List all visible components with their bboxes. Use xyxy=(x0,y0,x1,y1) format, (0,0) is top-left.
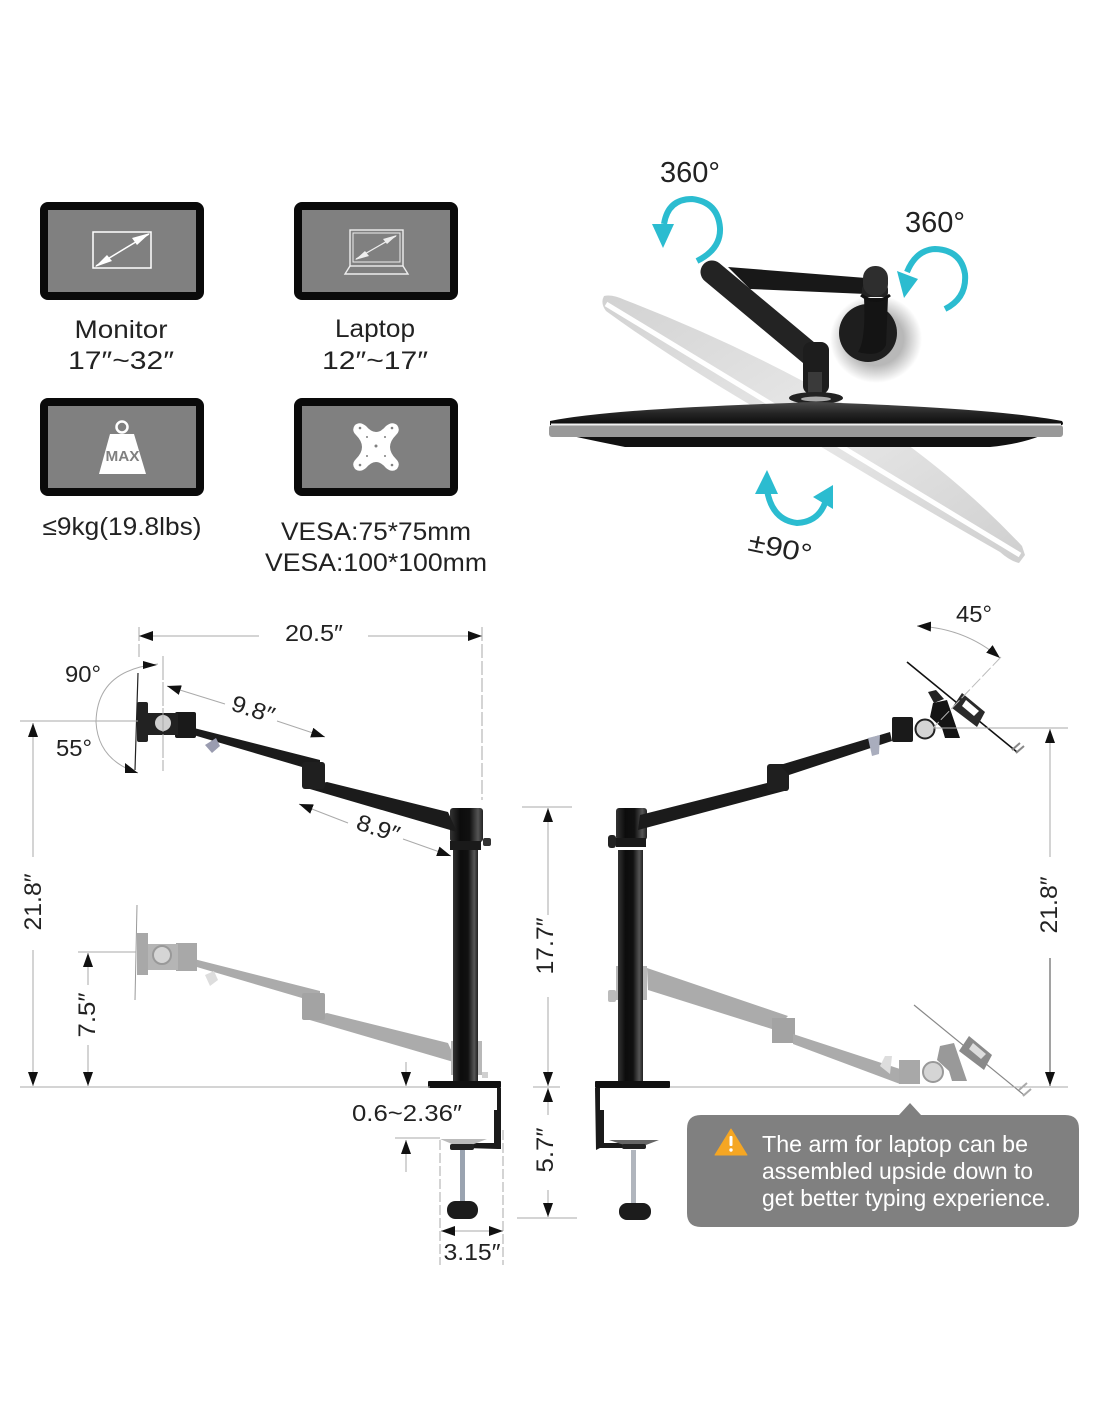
clamp xyxy=(428,1081,501,1219)
upper arm link xyxy=(712,272,843,404)
ground line right xyxy=(668,1086,1068,1088)
label: VESA sizes: VESA:100*100mm xyxy=(265,549,487,577)
arrow: top left rotation xyxy=(652,199,720,261)
label: laptop range: 12″~17″ xyxy=(322,347,428,375)
ghost lower laptop arm xyxy=(608,966,1031,1096)
label: VESA sizes: VESA:75*75mm xyxy=(281,518,471,546)
dimension: 7.5 inch xyxy=(74,952,136,1086)
tilted monitor (ghost) xyxy=(602,296,1025,563)
dimension: 45 degrees xyxy=(917,601,1001,728)
icon: warning xyxy=(715,1129,747,1155)
panel: laptop size xyxy=(298,206,454,375)
dimension: 20.5 inch xyxy=(139,620,482,800)
panel: rotation top view xyxy=(549,157,1063,569)
label: monitor range: Monitor xyxy=(74,316,168,344)
post top xyxy=(861,266,890,300)
dimension: 3.15 inch xyxy=(440,1130,503,1265)
arrow: top right rotation xyxy=(897,249,965,309)
laptop tray tilted xyxy=(907,662,1024,753)
panel: monitor size xyxy=(44,206,200,375)
dimension: 17.7 inch: 17.7″ xyxy=(532,917,559,974)
dimension: 21.8 inch right: 21.8″ xyxy=(1036,876,1063,934)
icon: max weight: MAX xyxy=(106,449,140,465)
shadow behind base xyxy=(830,295,922,383)
dimension: 9.8 inch xyxy=(167,686,325,737)
ground line left xyxy=(20,1086,430,1088)
dimension: 8.9 inch: 8.9″ xyxy=(353,809,403,847)
label: weight: ≤9kg(19.8lbs) xyxy=(42,513,202,541)
label: 360 left: 360° xyxy=(660,157,720,189)
icon: monitor xyxy=(44,206,200,296)
dimension: 5.7 inch xyxy=(517,1088,577,1218)
dimension: 9.8 inch: 9.8″ xyxy=(228,690,278,728)
callout text: assembled upside down to xyxy=(762,1158,1033,1184)
label: VESA sizes xyxy=(265,518,487,577)
label: laptop range xyxy=(322,315,428,375)
label: tilt 90: ±90° xyxy=(746,527,815,569)
mount base xyxy=(839,298,897,362)
label: monitor range: 17″~32″ xyxy=(68,347,174,375)
callout: upside down note xyxy=(687,1103,1079,1227)
dimension: 5.7 inch: 5.7″ xyxy=(532,1127,559,1172)
label: laptop range: Laptop xyxy=(335,315,415,343)
dimension: 45 degrees: 45° xyxy=(956,601,992,627)
dimension: clamp thickness xyxy=(352,1062,462,1172)
panel: laptop arm side view xyxy=(595,601,1068,1220)
label: monitor range xyxy=(68,316,174,375)
dimension: 21.8 inch left: 21.8″ xyxy=(20,873,47,930)
icon: max weight xyxy=(44,402,200,492)
dimension: clamp thickness: 0.6~2.36″ xyxy=(352,1100,462,1126)
dimension: tilt 90/55 xyxy=(56,656,163,773)
lower arm link xyxy=(728,267,866,294)
icon: VESA plate xyxy=(298,402,454,492)
pole and top arm xyxy=(608,700,960,1081)
clamp xyxy=(595,1081,670,1220)
panel: monitor arm side view xyxy=(20,620,577,1265)
dimension: 7.5 inch: 7.5″ xyxy=(74,992,101,1038)
dimension: tilt 90/55: 90° xyxy=(65,661,101,687)
callout text: get better typing experience. xyxy=(762,1185,1051,1211)
panel: weight capacity xyxy=(42,402,202,541)
dimension: 3.15 inch: 3.15″ xyxy=(444,1239,500,1265)
main monitor xyxy=(549,402,1063,447)
pole and top arm xyxy=(135,673,491,1081)
dimension: 20.5 inch: 20.5″ xyxy=(285,620,343,646)
callout text: The arm for laptop can be xyxy=(762,1131,1028,1157)
callout text xyxy=(762,1131,1051,1211)
ghost lower monitor arm xyxy=(135,905,488,1078)
dimension: 8.9 inch xyxy=(299,804,451,856)
label: 360 right: 360° xyxy=(905,207,965,239)
arrow: tilt xyxy=(755,470,833,523)
icon: laptop xyxy=(298,206,454,296)
dimension: tilt 90/55: 55° xyxy=(56,735,92,761)
panel: VESA xyxy=(265,402,487,577)
